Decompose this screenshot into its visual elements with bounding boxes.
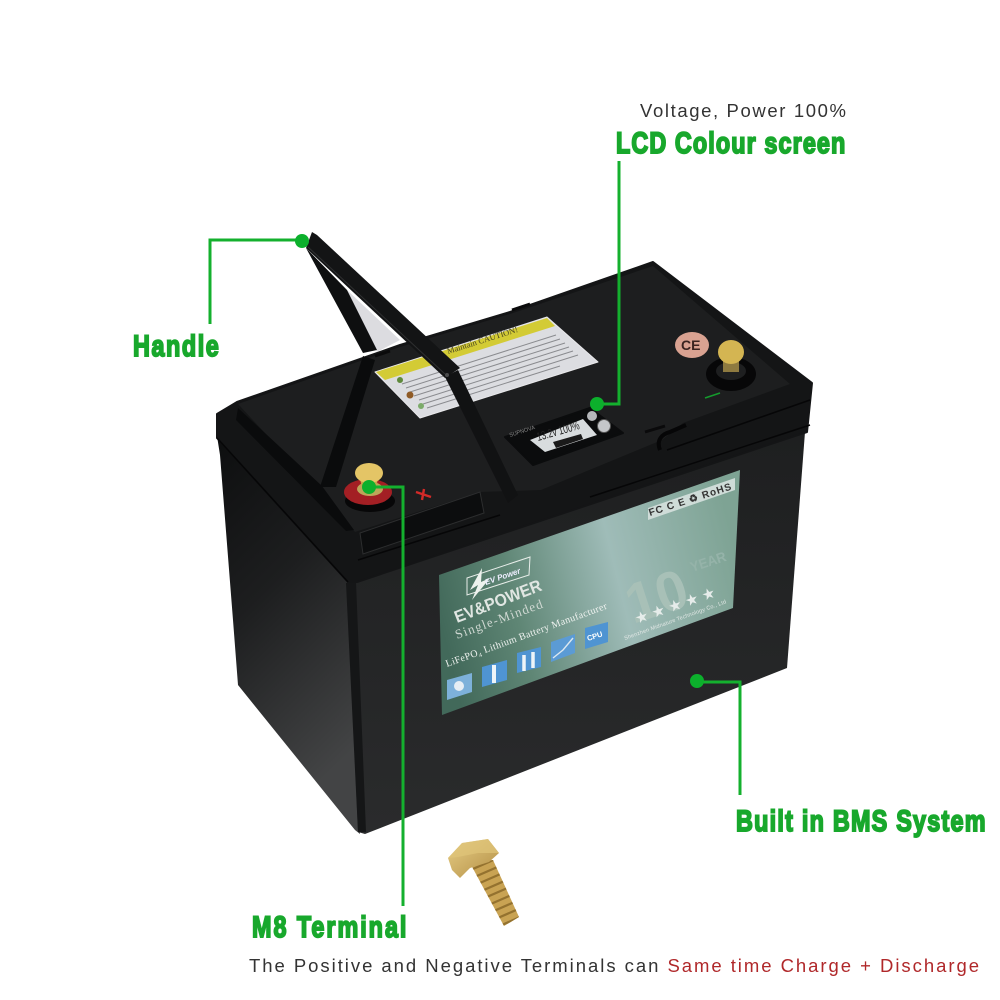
heading: Handle: Handle	[133, 329, 219, 363]
footer note: The Positive and Negative Terminals can Same time Charge + Discharge	[249, 955, 979, 976]
LCD screen: SUPNOVA	[509, 425, 536, 439]
caution label: Maintain CAUTION!	[446, 324, 519, 356]
battery lid rim	[217, 262, 812, 582]
leader: LCD	[590, 161, 619, 411]
lid front recess	[360, 492, 484, 554]
CE mark	[675, 332, 709, 358]
product label: Shenzhen Midnature Technology Co., Ltd	[624, 599, 727, 642]
brass bolt	[448, 839, 519, 926]
handle front arm	[306, 232, 460, 378]
heading: Built in BMS System: Built in BMS System	[736, 804, 986, 838]
battery lid top	[238, 266, 790, 532]
handle window	[347, 290, 400, 352]
feature icons: CPU	[586, 629, 604, 643]
LCD screen: 13.2v 100%	[535, 418, 581, 444]
leader: Handle	[210, 234, 309, 324]
lid rim grooves	[217, 400, 810, 582]
CE mark: CE	[681, 337, 700, 353]
callout: voltage: Voltage, Power 100%	[640, 100, 846, 121]
lid latch	[659, 425, 686, 450]
product label: YEAR	[688, 548, 728, 575]
product label: EV&POWER	[452, 576, 544, 627]
feature icons	[447, 622, 608, 700]
product label: Single-Minded	[453, 596, 545, 642]
front corner strip	[346, 582, 366, 832]
battery front side	[347, 432, 805, 834]
handle	[306, 232, 518, 503]
product label: ★★★★★	[633, 584, 718, 628]
LCD screen	[505, 408, 623, 465]
ten year mark: 10	[617, 556, 696, 635]
certification strip	[648, 478, 735, 520]
caution label	[375, 317, 598, 418]
handle back arm	[306, 248, 377, 353]
plus sign	[416, 489, 431, 500]
lid left band	[236, 408, 354, 531]
positive terminal	[344, 463, 395, 512]
product label	[439, 470, 740, 715]
brand logo	[467, 557, 530, 595]
product label: FC C E ♻ RoHS	[648, 482, 733, 519]
battery left side	[217, 436, 360, 834]
product label: LiFePO₄ Lithium Battery Manufacturer	[444, 601, 609, 670]
battery	[217, 232, 812, 834]
product label: EV Power	[484, 566, 522, 587]
leader: M8 Terminal	[362, 480, 403, 906]
leader: BMS	[690, 674, 740, 795]
lid slots	[375, 304, 665, 432]
heading: M8 Terminal: M8 Terminal	[252, 910, 406, 944]
heading: LCD Colour screen: LCD Colour screen	[616, 126, 845, 160]
negative terminal	[705, 340, 756, 398]
